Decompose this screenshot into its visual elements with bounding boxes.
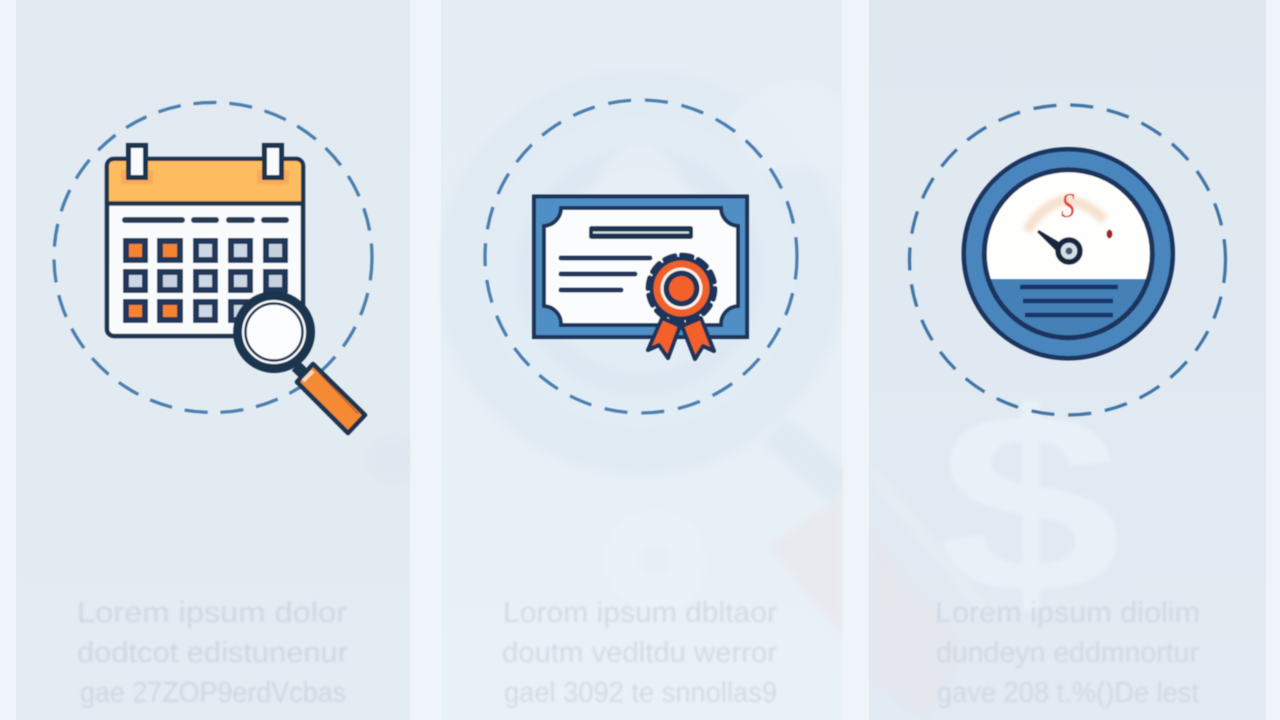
ghosted dollar sign: $ [938, 359, 1122, 647]
certificate paper [544, 208, 738, 325]
gauge dollar mark: S [1061, 186, 1075, 225]
gauge needle [1037, 230, 1061, 252]
gauge hub [1058, 240, 1080, 262]
dashed ring: certificate [485, 100, 797, 413]
caption: left column [77, 597, 348, 709]
binding ring left [121, 146, 153, 184]
calendar body [107, 159, 303, 336]
ghosted background artwork [366, 69, 985, 720]
gauge red dot [1106, 230, 1112, 238]
icon: gauge meter [964, 149, 1173, 358]
caption: right column: dundeyn eddmnortur [936, 637, 1199, 669]
caption: left column: Lorem ipsum dolor [77, 597, 347, 629]
caption: middle column [502, 597, 777, 709]
caption: middle column: doutm vedltdu werror [502, 637, 777, 669]
icon: calendar with magnifier [107, 146, 365, 433]
panel: middle column [441, 0, 842, 720]
magnifier [238, 296, 365, 433]
rosette seal [648, 255, 715, 328]
certificate title bar [589, 226, 693, 239]
panel: right column [869, 0, 1266, 720]
caption: right column [935, 597, 1200, 709]
rosette ribbons [648, 318, 714, 359]
gauge lower band [988, 279, 1149, 338]
certificate frame [534, 196, 747, 337]
dashed ring: calendar [54, 102, 372, 412]
date cells [126, 241, 285, 320]
weekday header lines [125, 217, 286, 223]
magnifier handle [297, 364, 365, 433]
caption: middle column: Lorom ipsum dbltaor [503, 597, 777, 629]
magnifier lens [238, 296, 310, 368]
icon: certificate with rosette [534, 196, 747, 359]
dashed ring: gauge [910, 105, 1226, 415]
gauge band lines [1020, 287, 1118, 315]
caption: left column: dodtcot edistunenur [77, 637, 348, 669]
gauge face [984, 170, 1152, 338]
caption: right column: gave 208 t.%()De lest [937, 677, 1199, 709]
certificate text lines [561, 258, 650, 290]
calendar header [109, 161, 301, 203]
caption: left column: gae 27ZOP9erdVcbas [80, 677, 346, 709]
gauge outer rim [964, 149, 1173, 358]
panel: left column [16, 0, 410, 720]
gauge tinted arc [1027, 200, 1104, 231]
caption: middle column: gael 3092 te snnollas9 [504, 677, 777, 709]
binding ring right [257, 146, 289, 184]
caption: right column: Lorem ipsum diolim [935, 597, 1200, 629]
